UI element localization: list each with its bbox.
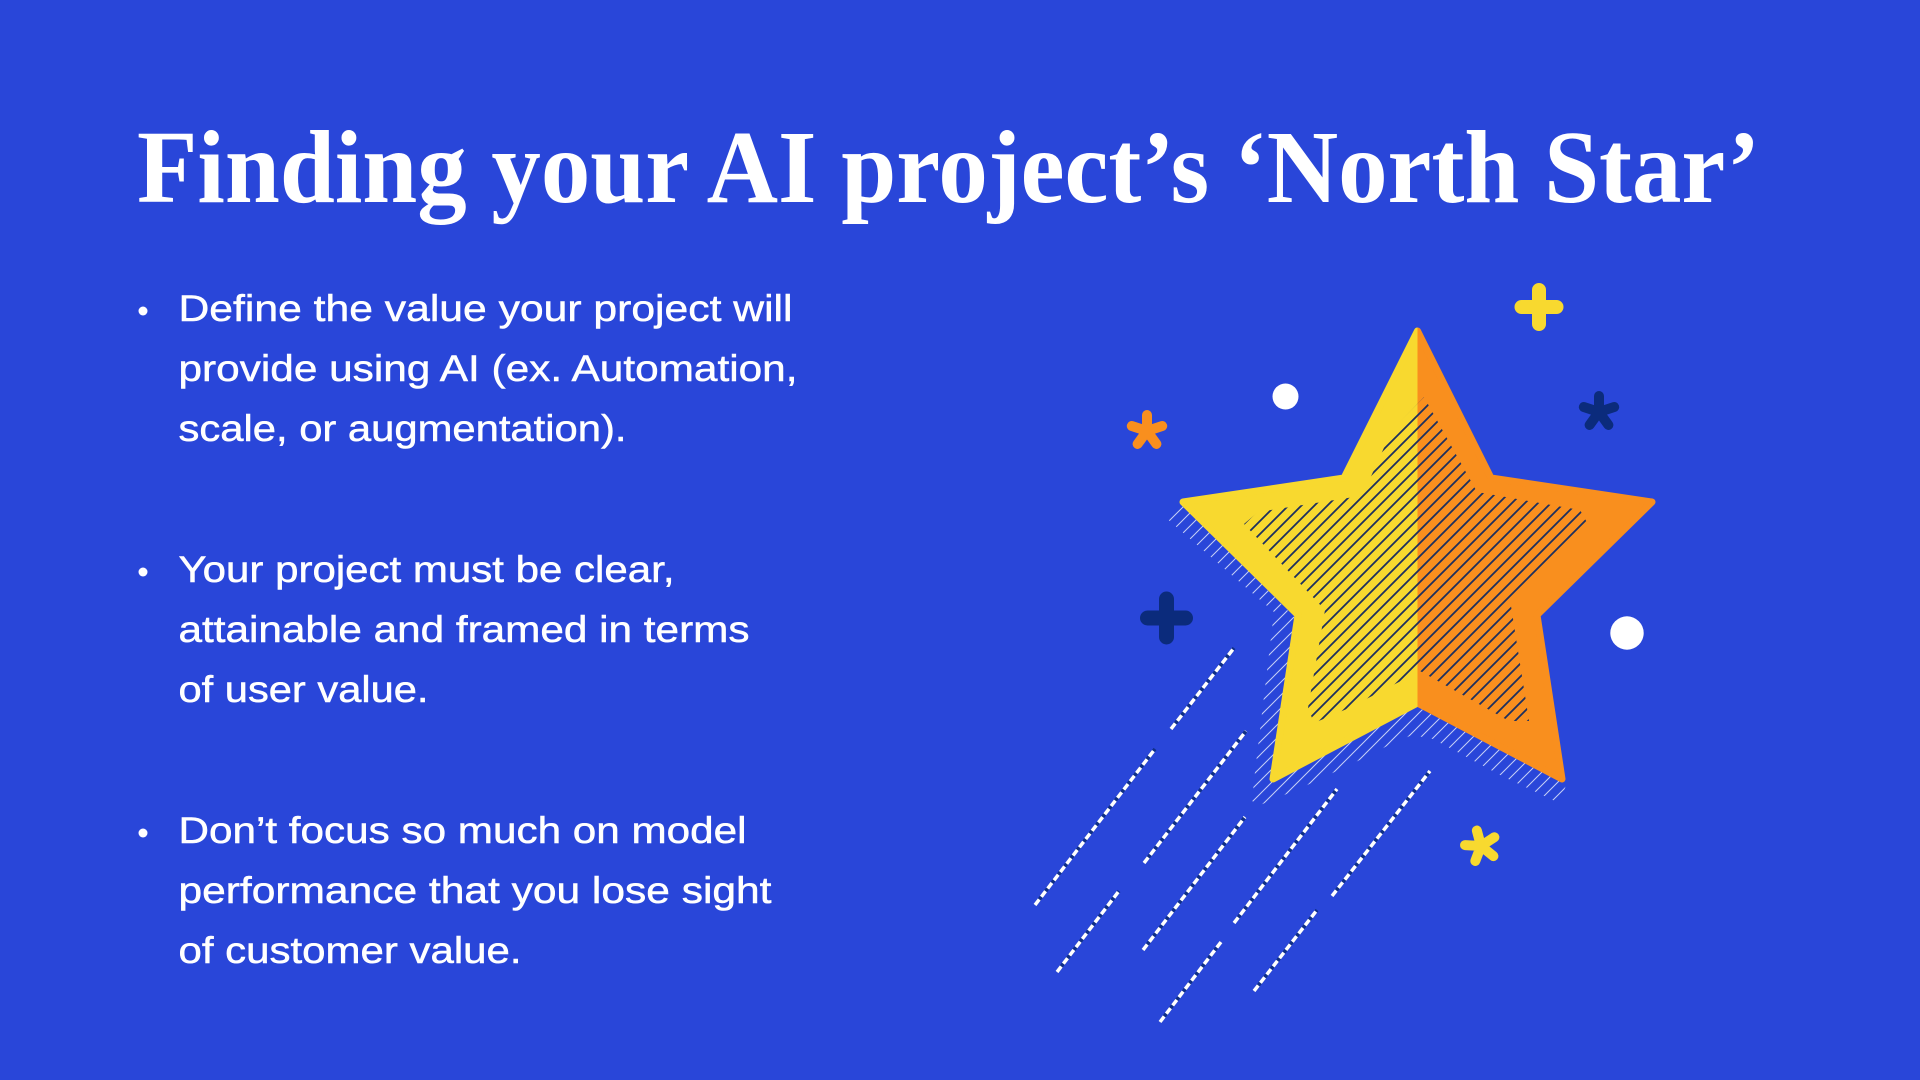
bullet: define the value: scale, or augmentation).: [178, 407, 626, 449]
icon: navy plus: [1148, 599, 1186, 637]
bullet: define the value: Define the value your project will: [178, 287, 792, 329]
bullet: clear and attainable: [138, 548, 750, 710]
bullet: customer value: Don’t focus so much on model: [178, 809, 746, 851]
illustration: shooting star: [1035, 290, 1652, 1022]
title: Finding your AI project’s ‘North Star’: [137, 110, 1760, 225]
star inner hatching: [1244, 397, 1589, 723]
icon: orange asterisk: [1132, 415, 1162, 444]
motion trail: dashed lines: [1035, 648, 1430, 1022]
star shadow hatching: [1165, 500, 1567, 805]
bullet: define the value: [138, 287, 798, 449]
star: yellow left half: [1180, 328, 1418, 782]
icon: yellow plus: [1522, 290, 1556, 324]
bullet: clear and attainable: Your project must be clear,: [178, 548, 674, 590]
icon: yellow asterisk: [1462, 827, 1499, 862]
bullet: customer value: [138, 809, 772, 971]
bullet: clear and attainable: of user value.: [178, 668, 428, 710]
icon: small white dot: [1272, 384, 1298, 410]
bullet: customer value: of customer value.: [178, 929, 522, 971]
bullet: define the value: provide using AI (ex. Automation,: [178, 347, 798, 389]
bullet list: [138, 287, 798, 971]
icon: large white dot: [1610, 616, 1644, 650]
star: orange right half: [1418, 328, 1656, 782]
bullet: customer value: performance that you lose sight: [178, 869, 772, 911]
bullet: clear and attainable: attainable and framed in terms: [178, 608, 750, 650]
icon: navy asterisk: [1584, 396, 1614, 425]
